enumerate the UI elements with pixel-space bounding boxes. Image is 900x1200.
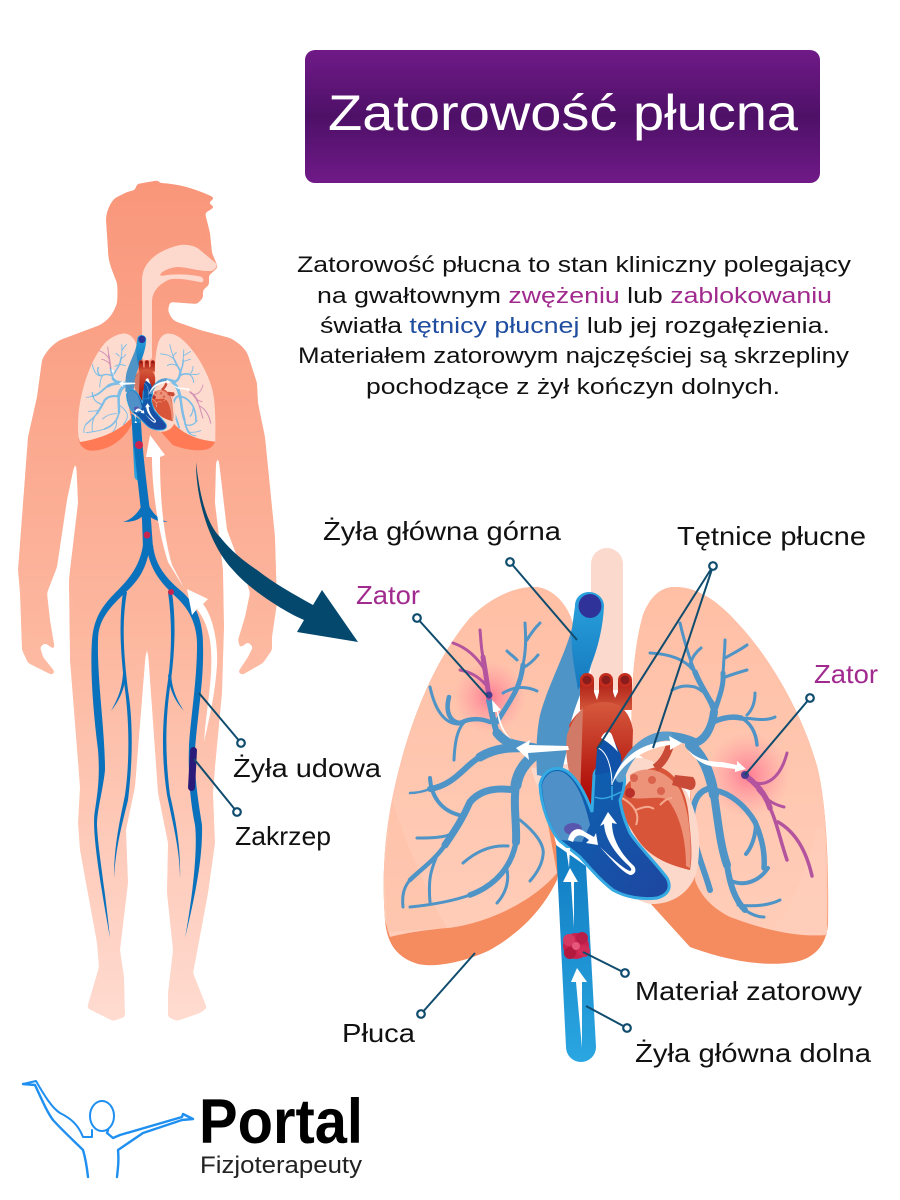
logo icon: figure with raised arms (23, 1081, 193, 1177)
left lung (384, 587, 574, 965)
intro text block: Materiałem zatorowym najczęściej są skrzepliny (298, 343, 849, 368)
logo (23, 1081, 363, 1179)
intro text block (297, 252, 851, 399)
diagram labels: Żyła główna dolna (635, 1038, 872, 1068)
diagram labels: Żyła udowa (233, 753, 382, 783)
title banner (305, 50, 820, 183)
diagram labels (233, 516, 878, 1068)
intro text block: pochodzące z żył kończyn dolnych. (366, 374, 780, 399)
heart and vessels (492, 592, 746, 1062)
diagram labels: Zakrzep (235, 821, 331, 851)
pulmonary branches (403, 623, 780, 917)
diagram labels: Zator (356, 580, 420, 610)
zator glow right (706, 733, 790, 817)
diagram labels: Materiał zatorowy (635, 976, 862, 1006)
white flow arrow lower (187, 589, 217, 742)
intro text block: Zatorowość płucna to stan kliniczny polegający (297, 252, 851, 277)
lung and heart diagram (384, 548, 828, 1062)
human body figure (18, 180, 277, 1021)
thrombus in femoral vein (188, 747, 197, 791)
small emboli (135, 441, 174, 595)
white flow arrow upper (146, 435, 184, 588)
intro text block: na gwałtownym zwężeniu lub zablokowaniu (317, 283, 832, 308)
intro text block: światła tętnicy płucnej lub jej rozgałęzienia. (320, 313, 830, 338)
airway (142, 245, 218, 360)
logo wordmark: Portal (199, 1087, 363, 1157)
leader lines (194, 558, 814, 1032)
diagram labels: Zator (814, 659, 878, 689)
large curved arrow (196, 462, 358, 642)
embolized branches (453, 630, 812, 876)
zator glow left (454, 661, 526, 733)
small lungs (78, 333, 216, 481)
logo subtitle: Fizjoterapeuty (200, 1152, 362, 1179)
body silhouette (18, 180, 277, 1021)
diagram labels: Płuca (342, 1018, 416, 1048)
title: Zatorowość płucna (328, 85, 798, 141)
diagram labels: Tętnice płucne (677, 521, 866, 551)
right lung (631, 587, 828, 964)
trachea (591, 548, 623, 690)
leg veins (91, 423, 203, 938)
diagram labels: Żyła główna górna (323, 516, 562, 546)
